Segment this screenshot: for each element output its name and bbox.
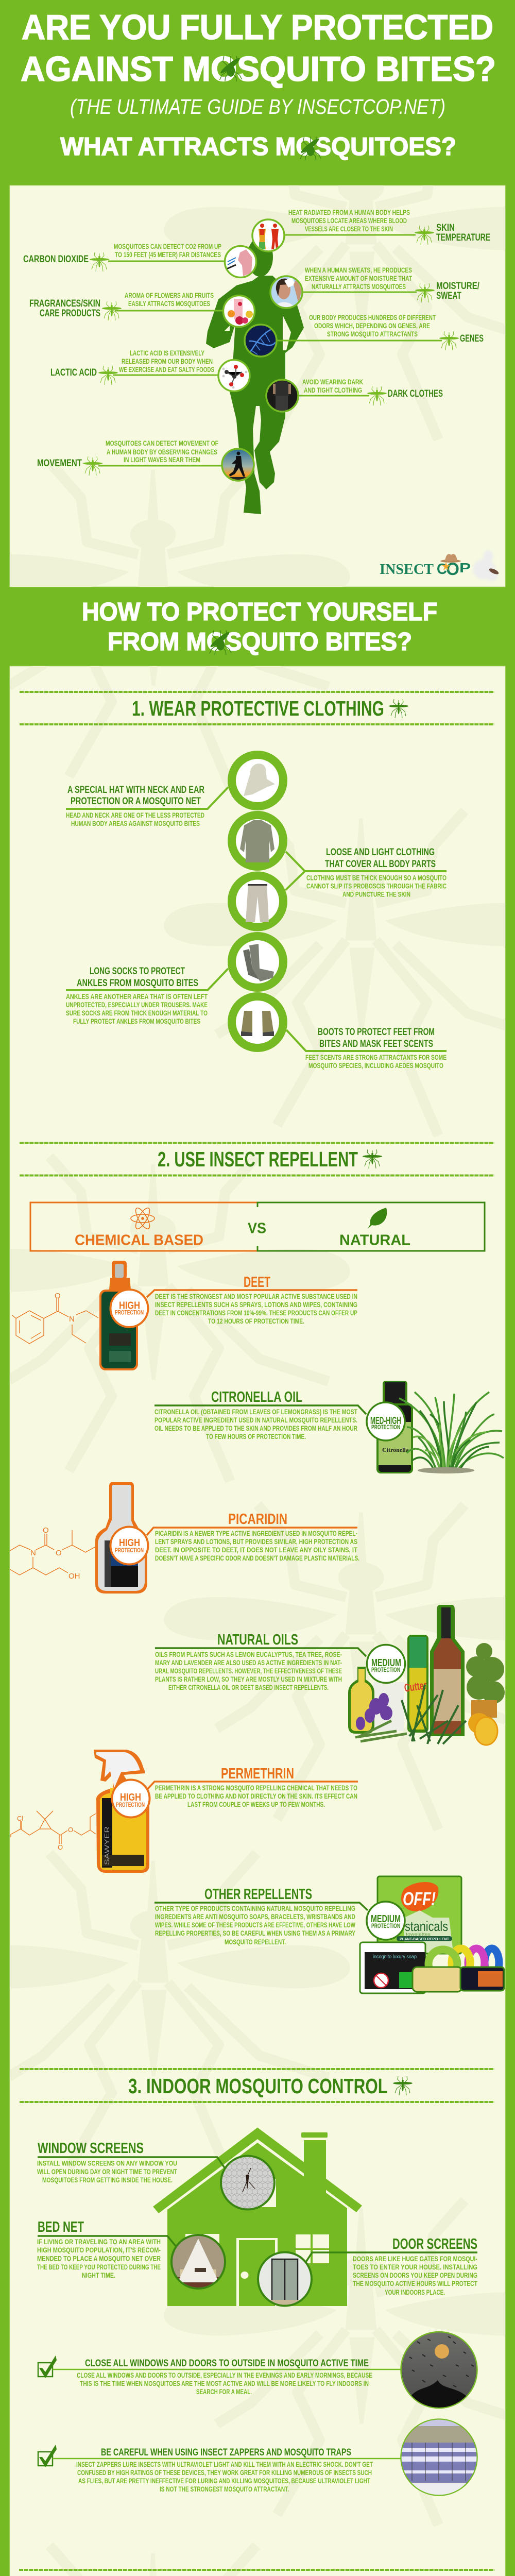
title (21, 8, 496, 89)
picture: bed with net (171, 2235, 225, 2293)
icon: mosquito (367, 386, 387, 405)
picture: mosquito swarm at dusk (401, 2332, 477, 2411)
text: permethrin (148, 1766, 358, 1808)
section 3 heading: 3. INDOOR MOSQUITO CONTROL (128, 2074, 388, 2098)
text: picaridin (147, 1511, 359, 1562)
text: hat: HEAD AND NECK ARE ONE OF THE LESS PROTECTED (66, 811, 204, 819)
panel: carbon dioxide: CARBON DIOXIDE (23, 253, 89, 265)
callout: window screens (37, 2140, 274, 2209)
logo: insect cop (top): C (437, 561, 447, 578)
text: socks: FULLY PROTECT ANKLES FROM MOSQUITO BITES (73, 1017, 200, 1025)
ring: hat (232, 755, 283, 806)
panel: fragrances: AROMA OF FLOWERS AND FRUITS (125, 291, 214, 299)
ring: shirt (232, 815, 283, 867)
text: socks (66, 965, 208, 1025)
tip: insect zappers (38, 2419, 478, 2496)
text: other repellents: OTHER REPELLENTS (204, 1886, 312, 1903)
product: off botanicals box and soap and bracelets (360, 1876, 504, 1993)
picture: DNA (245, 325, 277, 357)
icon: mosquito (83, 456, 102, 476)
callout: window screens: INSTALL WINDOW SCREENS ON ANY WINDOW YOU (37, 2159, 177, 2167)
panel: movement: MOVEMENT (37, 457, 82, 469)
text: clothing: AND PUNCTURE THE SKIN (342, 890, 410, 899)
text: DEET (147, 1274, 357, 1325)
molecule: permethrin: O (58, 1843, 63, 1851)
comparison: chemical vs natural (30, 1202, 485, 1251)
text: clothing: CANNOT SLIP ITS PROBOSCIS THROUGH THE FABRIC (306, 882, 447, 890)
comparison: chemical vs natural: CHEMICAL BASED (75, 1232, 203, 1249)
panel: genes: OUR BODY PRODUCES HUNDREDS OF DIFFERENT (309, 313, 436, 321)
panel: carbon dioxide: TO 150 FEET (45 METER) FAR DISTANCES (115, 250, 221, 259)
badge: medium protection: MEDIUM (371, 1657, 401, 1669)
product: citronella bottle and lemongrass (367, 1381, 504, 1473)
panel: dark clothes: AND TIGHT CLOTHING (304, 386, 362, 394)
panel: movement (37, 439, 254, 481)
callout: door screens: YOUR INDOORS PLACE. (385, 2288, 445, 2296)
picture: perfume and fruits (224, 296, 254, 327)
leaves top right (466, 1643, 505, 1718)
section 3 heading (20, 2069, 494, 2102)
text: permethrin: BE APPLIED TO CLOTHING AND NOT DIRECTLY ON THE SKIN. ITS EFFECT CAN (155, 1792, 357, 1800)
text: DEET: DEET (244, 1274, 270, 1291)
text: other repellents: INGREDIENTS ARE ANTI MOSQUITO SOAPS, BRACELETS, WRISTBANDS AND (155, 1912, 355, 1921)
panel: lactic acid: WE EXERCISE AND EAT SALTY FOODS (119, 365, 214, 374)
text: socks: ANKLES ARE ANOTHER AREA THAT IS OFTEN LEFT (66, 992, 208, 1001)
product: DEET bottle (99, 1261, 148, 1370)
product: citronella bottle and lemongrass: Citronella (382, 1446, 409, 1453)
runner silhouette (206, 238, 304, 514)
product: off botanicals box and soap and bracelets: towelettes (406, 1932, 431, 1937)
tip: insect zappers: IS NOT THE STRONGEST MOSQUITO ATTRACTANT. (160, 2485, 289, 2493)
product: off botanicals box and soap and bracelets: OFF! (403, 1888, 436, 1909)
text: citronella oil: POPULAR ACTIVE INGREDIENT USED IN NATURAL MOSQUITO REPELLENTS. (154, 1416, 357, 1424)
logo: insect cop (top): INSECT (380, 561, 434, 578)
molecule: picaridin: O (56, 1549, 62, 1557)
molecule: DEET (12, 1292, 98, 1344)
comparison: chemical vs natural: NATURAL (339, 1232, 410, 1249)
panel: genes: STRONG MOSQUITO ATTRACTANTS (327, 330, 418, 338)
molecule: permethrin (11, 1811, 96, 1851)
picture: door with screen (258, 2252, 312, 2307)
ring: boots (232, 996, 283, 1048)
panel: movement: IN LIGHT WAVES NEAR THEM (124, 455, 200, 464)
badge: high protection: PROTECTION (115, 1548, 144, 1554)
badge: medium protection (367, 1902, 405, 1940)
text: DEET: TO 12 HOURS OF PROTECTION TIME. (208, 1317, 304, 1325)
text: citronella oil: TO FEW HOURS OF PROTECTION TIME. (206, 1432, 306, 1440)
panel: skin temperature: MOSQUITOES LOCATE AREAS WHERE BLOOD (291, 216, 407, 225)
icon: mosquito (393, 2076, 413, 2095)
callout: bed net (37, 2219, 225, 2293)
product: off botanicals box and soap and bracelets: PLANT-BASED REPELLENT (400, 1938, 450, 1941)
panel: dark clothes (266, 378, 443, 412)
text: citronella oil: CITRONELLA OIL (211, 1389, 302, 1405)
callout: bed net: THE BED TO KEEP YOU PROTECTED DURING THE (37, 2263, 161, 2271)
icon: mosquito (102, 301, 122, 320)
lavender (356, 1693, 392, 1730)
tip: close windows: CLOSE ALL WINDOWS AND DOORS TO OUTSIDE IN MOSQUITO ACTIVE TIME (85, 2358, 369, 2369)
panel: lactic acid (50, 349, 250, 392)
text: picaridin: PICARIDIN (228, 1511, 287, 1528)
tip: insect zappers: BE CAREFUL WHEN USING INSECT ZAPPERS AND MOSQUITO TRAPS (101, 2447, 351, 2458)
text: permethrin: PERMETHRIN IS A STRONG MOSQUITO REPELLING CHEMICAL THAT NEEDS TO (155, 1784, 357, 1792)
panel: movement: A HUMAN BODY BY OBSERVING CHANGES (107, 448, 217, 456)
panel: skin temperature: VESSELS ARE CLOSER TO THE SKIN (305, 225, 393, 233)
callout: bed net: HIGH MOSQUITO POPULATION, IT'S RECOM- (37, 2246, 161, 2254)
badge: high protection: HIGH (119, 1537, 140, 1549)
badge: medium protection: PROTECTION (371, 1667, 400, 1673)
text: natural oils: MARY AND LAVENDER ARE ALSO USED AS ACTIVE INGREDIENTS IN NAT- (155, 1658, 342, 1667)
badge: medium protection: MEDIUM (371, 1913, 401, 1925)
badge: high protection: HIGH (119, 1300, 140, 1312)
brown spray bottle (430, 1605, 465, 1736)
panel: genes: ODORS WHICH, DEPENDING ON GENES, ARE (314, 321, 430, 330)
panel: carbon dioxide (23, 242, 256, 277)
picture: heat map body (252, 219, 284, 251)
text: DEET: DEET IN CONCENTRATIONS FROM 10%-99%. THESE PRODUCTS CAN OFFER UP (155, 1309, 357, 1317)
soap (360, 1942, 425, 1993)
callout: bed net: BED NET (38, 2219, 84, 2235)
icon: mosquito in heading (300, 137, 321, 161)
picture: bug zapper (401, 2419, 478, 2496)
tip: insect zappers: AS FLIES, BUT ARE PRETTY INEFFECTIVE FOR LURING AND KILLING MOSQUITOES, BECAUSE ULTRAVIOLET LIGHT (78, 2477, 370, 2485)
callout: bed net: MENDED TO PLACE A MOSQUITO NET OVER (37, 2255, 161, 2263)
yellow bottle (348, 1667, 374, 1734)
text: citronella oil: CITRONELLA OIL (OBTAINED FROM LEAVES OF LEMONGRASS) IS THE MOST (154, 1408, 357, 1416)
molecule: DEET: N (69, 1315, 75, 1324)
panel: skin temperature: SKIN (436, 222, 455, 233)
molecule: picaridin: OH (68, 1572, 80, 1581)
subtitle: (THE ULTIMATE GUIDE BY INSECTCOP.NET) (70, 95, 445, 118)
text: permethrin: LAST FROM COUPLE OF WEEKS UP TO FEW MONTHS. (187, 1800, 325, 1808)
panel: dark clothes: AVOID WEARING DARK (302, 378, 363, 386)
text: picaridin: DEET. IN OPPOSITE TO DEET, IT DOES NOT LEAVE ANY OILY STAINS, IT (155, 1546, 357, 1554)
text: natural oils: NATURAL OILS (217, 1632, 298, 1648)
text: picaridin: PICARIDIN IS A NEWER TYPE ACTIVE INGREDIENT USED IN MOSQUITO REPEL- (155, 1529, 357, 1537)
logo: insect cop (top) (380, 550, 500, 581)
badge: high protection: HIGH (120, 1792, 141, 1803)
text: clothing (306, 846, 447, 899)
panel: carbon dioxide: MOSQUITOES CAN DETECT CO2 FROM UP (114, 242, 221, 250)
picture: sweating woman (270, 276, 302, 309)
text: other repellents (154, 1886, 368, 1946)
badge: high protection (110, 1527, 148, 1564)
icon: mosquito (98, 366, 118, 385)
bracelets (428, 1948, 499, 1978)
section 4 heading (19, 2570, 494, 2576)
section 2 heading (20, 1143, 494, 1176)
text: citronella oil (154, 1389, 366, 1440)
logo: insect cop (top): P (459, 560, 471, 575)
panel: moisture: SWEAT (436, 290, 461, 301)
herbs and fir (402, 1685, 466, 1744)
ring: trousers (232, 876, 283, 927)
panel: fragrances: CARE PRODUCTS (40, 308, 100, 319)
text: natural oils: URAL MOSQUITO REPELLENTS. HOWEVER, THE EFFECTIVENESS OF THESE (155, 1667, 342, 1675)
picture: lactic acid molecule (218, 360, 250, 392)
badge: med-high protection (367, 1402, 405, 1440)
text: natural oils: EITHER CITRONELLA OIL OR DEET BASED INSECT REPELLENTS. (168, 1683, 329, 1691)
badge: high protection: PROTECTION (116, 1802, 145, 1808)
tip: insect zappers: CONFUSED BY HIGH RATINGS OF THESE DEVICES, THEY WORK GREAT FOR KILLING NUMEROUS OF INSECTS SUCH (77, 2468, 372, 2477)
icon: mosquito in title (219, 56, 242, 81)
badge: medium protection: PROTECTION (371, 1923, 400, 1929)
panel: skin temperature: TEMPERATURE (436, 232, 490, 243)
text: natural oils (155, 1632, 366, 1691)
product: picaridin bottle (95, 1482, 148, 1594)
molecule: permethrin: Cl (17, 1815, 23, 1822)
callout: window screens: WILL OPEN DURING DAY OR NIGHT TIME TO PREVENT (37, 2167, 177, 2176)
heading: how to protect yourself: FROM MOSQUITO BITES? (108, 628, 412, 656)
tip: close windows (38, 2332, 477, 2411)
text: clothing: CLOTHING MUST BE THICK ENOUGH SO A MOSQUITO (306, 874, 447, 882)
lemon (468, 1713, 490, 1734)
text: boots: BOOTS TO PROTECT FEET FROM (318, 1026, 435, 1038)
icon: mosquito (363, 1149, 382, 1168)
text: socks: LONG SOCKS TO PROTECT (90, 965, 185, 977)
molecule: DEET: O (55, 1292, 61, 1300)
heading: how to protect yourself (82, 598, 437, 656)
badge: med-high protection: PROTECTION (371, 1425, 400, 1431)
text: picaridin: DOESN'T HAVE A SPECIFIC ODOR AND DOESN'T DAMAGE PLASTIC MATERIALS. (155, 1554, 359, 1562)
picture: mosquito on screen (221, 2156, 274, 2209)
tip: insect zappers: INSECT ZAPPERS LURE INSECTS WITH ULTRAVIOLET LIGHT AND KILL THEM WITH AN ELECTRIC SHOCK. DON'T GET (76, 2460, 373, 2468)
panel: fragrances: FRAGRANCES/SKIN (29, 298, 100, 309)
icon: mosquito (415, 226, 434, 245)
text: hat: HUMAN BODY AREAS AGAINST MOSQUITO BITES (71, 819, 200, 827)
title: AGAINST MOSQUITO BITES? (21, 49, 496, 89)
illustration: indoor house (153, 2128, 362, 2306)
tip: close windows: CLOSE ALL WINDOWS AND DOORS TO OUTSIDE, ESPECIALLY IN THE EVENINGS AND EARLY MORNINGS, BECAUSE (77, 2371, 372, 2379)
text: other repellents: MOSQUITO REPELLENT. (225, 1938, 286, 1946)
panel: moisture: EXTENSIVE AMOUNT OF MOISTURE THAT (305, 274, 412, 282)
picture: runner at sunset (222, 449, 254, 481)
molecule: permethrin: O (68, 1826, 73, 1834)
text: picaridin: LENT SPRAYS AND LOTIONS, BUT PROVIDES SIMILAR, HIGH PROTECTION AS (155, 1537, 357, 1546)
white jar (373, 1682, 404, 1731)
icon: mosquito in heading (209, 631, 231, 655)
icon: mosquito (389, 699, 408, 718)
panel: moisture: WHEN A HUMAN SWEATS, HE PRODUCES (305, 266, 412, 274)
text: clothing: LOOSE AND LIGHT CLOTHING (326, 846, 435, 858)
text: permethrin: PERMETHRIN (221, 1766, 294, 1782)
panel: skin temperature (252, 208, 490, 251)
section 1 heading (20, 692, 494, 724)
icon: check box (38, 2355, 57, 2378)
panel: lactic acid: LACTIC ACID IS EXTENSIVELY (130, 349, 204, 357)
text: boots (305, 1026, 447, 1070)
icon: mosquito (439, 331, 459, 350)
heading: what attracts mosquitoes: WHAT ATTRACTS MOSQUITOES? (60, 133, 456, 161)
tip: close windows: SEARCH FOR A MEAL. (196, 2387, 252, 2396)
badge: med-high protection: MED-HIGH (370, 1415, 401, 1427)
icon: leaf (368, 1208, 387, 1229)
molecule: picaridin: N (30, 1549, 36, 1557)
text: boots: FEET SCENTS ARE STRONG ATTRACTANTS FOR SOME (305, 1053, 447, 1061)
panel: fragrances: EASILY ATTRACTS MOSQUITOES (128, 299, 210, 308)
text: socks: SURE SOCKS ARE FROM THICK ENOUGH MATERIAL TO (66, 1009, 208, 1017)
panel: movement: MOSQUITOES CAN DETECT MOVEMENT OF (106, 439, 218, 447)
callout: door screens (258, 2236, 477, 2307)
icon: mosquito (90, 252, 109, 272)
section 2 heading: 2. USE INSECT REPELLENT (158, 1147, 358, 1171)
text: boots: MOSQUITO SPECIES, INCLUDING AEDES MOSQUITO (308, 1061, 443, 1070)
callout: bed net: IF LIVING OR TRAVELING TO AN AREA WITH (37, 2238, 161, 2246)
panel: moisture: NATURALLY ATTRACTS MOSQUITOES (312, 282, 406, 291)
text: hat: PROTECTION OR A MOSQUITO NET (71, 795, 201, 807)
molecule: picaridin (10, 1526, 95, 1581)
badge: high protection (112, 1780, 149, 1818)
panel: genes: GENES (460, 333, 484, 344)
picture: nose and breath (225, 246, 256, 277)
panel: fragrances (29, 291, 254, 327)
panel: lactic acid: RELEASED FROM OUR BODY WHEN (122, 357, 213, 365)
callout: window screens: MOSQUITOES FROM GETTING INSIDE THE HOUSE. (42, 2176, 173, 2184)
panel: skin temperature: HEAT RADIATED FROM A HUMAN BODY HELPS (288, 208, 410, 216)
text: other repellents: OTHER TYPE OF PRODUCTS CONTAINING NATURAL MOSQUITO REPELLING (155, 1904, 355, 1912)
icon: check box (38, 2445, 57, 2467)
section 1 heading: 1. WEAR PROTECTIVE CLOTHING (132, 697, 384, 720)
product: permethrin bottle: SAWYER (103, 1826, 111, 1865)
text: other repellents: REPELLING PROPERTIES, SO BE CAREFUL WHEN USING THEM AS A PRIMARY (155, 1929, 355, 1937)
logo: insect cop (top): O (446, 560, 459, 579)
comparison: chemical vs natural: VS (248, 1220, 266, 1236)
icon: atom (131, 1206, 154, 1231)
soap: incognito luxury soap (373, 1954, 417, 1960)
text: socks: UNPROTECTED, ESPECIALLY UNDER TROUSERS. MAKE (66, 1001, 208, 1009)
product: off botanicals box and soap and bracelets: stanicals (405, 1919, 448, 1934)
product: natural oils group: Cutter (403, 1679, 428, 1694)
panel: lactic acid: LACTIC ACID (50, 367, 97, 378)
text: boots: BITES AND MASK FEET SCENTS (319, 1038, 433, 1049)
picture: man in dark clothes (266, 380, 298, 412)
product: permethrin bottle (94, 1750, 149, 1873)
callout: door screens: TOES TO ENTER YOUR HOUSE. INSTALLING (353, 2263, 477, 2271)
plant: lemongrass (399, 1392, 504, 1472)
heading: how to protect yourself: HOW TO PROTECT YOURSELF (82, 598, 437, 626)
text: socks: ANKLES FROM MOSQUITO BITES (77, 977, 198, 989)
text: clothing: THAT COVER ALL BODY PARTS (325, 858, 436, 870)
product: natural oils group (348, 1605, 505, 1745)
text: hat: A SPECIAL HAT WITH NECK AND EAR (67, 784, 204, 795)
text: DEET: DEET IS THE STRONGEST AND MOST POPULAR ACTIVE SUBSTANCE USED IN (155, 1292, 357, 1300)
callout: bed net: NIGHT TIME. (82, 2271, 115, 2279)
panel: genes (245, 313, 484, 357)
text: other repellents: WIPES. WHILE SOME OF THESE PRODUCTS ARE EFFECTIVE, OTHERS HAVE LOW (155, 1921, 356, 1929)
text: natural oils: OILS FROM PLANTS SUCH AS LEMON EUCALYPTUS, TEA TREE, ROSE- (155, 1650, 342, 1658)
badge: high protection: PROTECTION (115, 1310, 144, 1316)
ring: long socks (232, 936, 283, 988)
tip: close windows: THIS IS THE TIME WHEN MOSQUITOES ARE THE MOST ACTIVE AND WILL BE MORE LIKELY TO FLY INDOORS IN (80, 2379, 369, 2387)
molecule: picaridin: O (43, 1526, 49, 1535)
panel: moisture (270, 266, 479, 309)
badge: high protection (110, 1290, 148, 1327)
text: natural oils: PLANTS IS RATHER LOW, SO THEY ARE MOSTLY USED IN MIXTURE WITH (155, 1675, 342, 1683)
panel: dark clothes: DARK CLOTHES (388, 388, 443, 399)
text: citronella oil: OIL NEEDS TO BE APPLIED TO THE SKIN AND PROVIDES FROM HALF AN HOUR (154, 1424, 357, 1432)
text: hat (66, 784, 204, 827)
callout: door screens: DOOR SCREENS (392, 2236, 477, 2252)
callout: window screens: WINDOW SCREENS (38, 2140, 144, 2157)
badge: medium protection (367, 1645, 405, 1683)
callout: door screens: DOORS ARE LIKE HUGE GATES FOR MOSQUI- (353, 2255, 477, 2263)
panel: moisture: MOISTURE/ (436, 280, 479, 292)
icon: mosquito (415, 283, 435, 302)
connector lines for clothing (66, 787, 447, 1051)
green small bottle (407, 1635, 428, 1733)
title: ARE YOU FULLY PROTECTED (22, 8, 493, 47)
text: DEET: INSECT REPELLENTS SUCH AS SPRAYS, LOTIONS AND WIPES, CONTAINING (155, 1300, 357, 1309)
